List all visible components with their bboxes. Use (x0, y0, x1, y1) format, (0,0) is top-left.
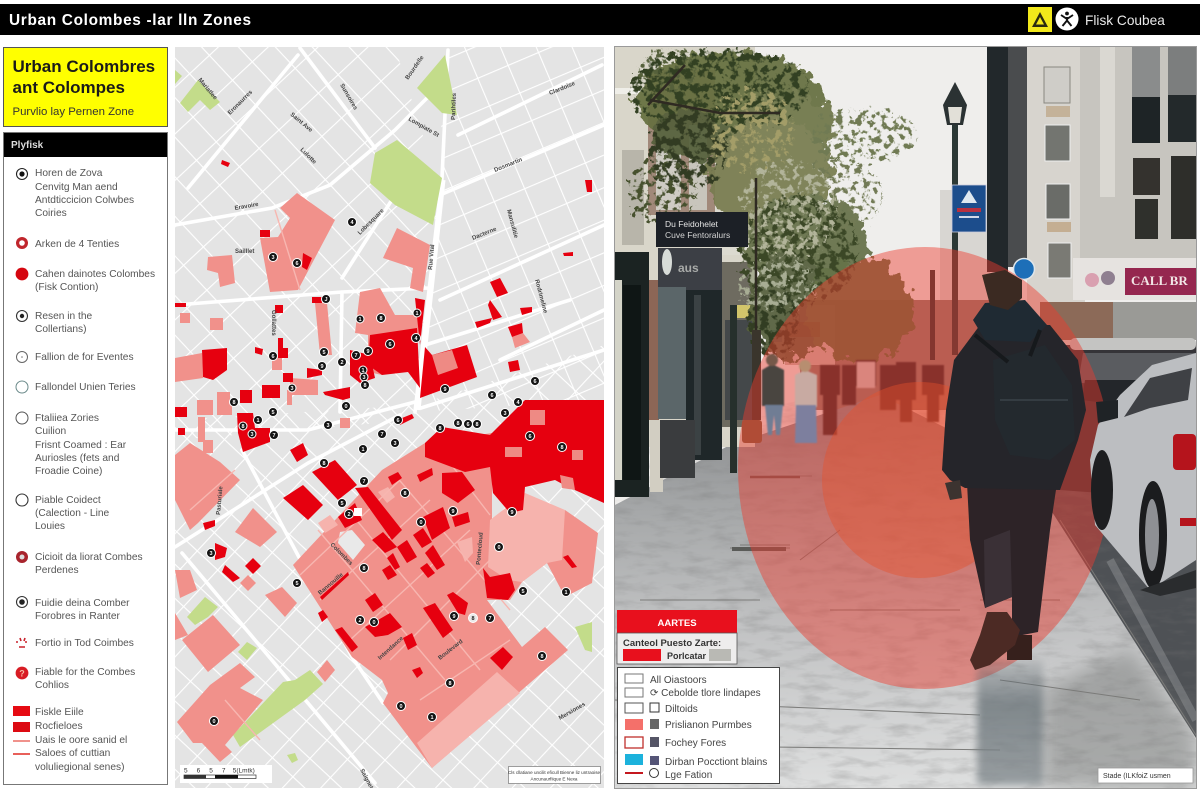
legend item 12 (16, 667, 135, 691)
legend item 1: Cenvitg Man aend (35, 182, 118, 193)
sign board: Cuve Fentoralurs (665, 230, 730, 240)
incident markers: 3 (393, 441, 397, 447)
bar risk label: Flisk Coubea (1085, 13, 1165, 28)
legend item 10 (16, 596, 130, 622)
street name labels: Gollattes (270, 310, 276, 336)
incident markers: 0 (372, 620, 376, 626)
legend line 2 (13, 748, 124, 773)
dark parked car (1060, 338, 1196, 500)
yellow title panel (4, 48, 168, 126)
street name labels: Boulevard (438, 639, 465, 662)
key row 6: Dirban Pocctiont blains (665, 757, 767, 768)
photo panel: street scene (615, 46, 1196, 788)
street name labels: Saint Ave (289, 112, 314, 134)
legend item 4 (16, 310, 93, 335)
facade windows (1044, 47, 1196, 278)
incident markers: 8 (540, 654, 544, 660)
incident markers: 6 (533, 379, 537, 385)
incident markers: 6 (271, 354, 275, 360)
incident markers: 5 (322, 350, 326, 356)
tree dark leaf clusters (630, 48, 860, 360)
incident markers: 4 (516, 400, 520, 406)
incident markers: 9 (366, 349, 370, 355)
incident markers (206, 218, 570, 726)
incident markers: 7 (488, 616, 492, 622)
legend item 9: Perdenes (35, 565, 79, 576)
street name labels: Parihtiles (451, 92, 458, 120)
street name labels: Bourdelle (405, 54, 426, 81)
street name labels: Rue Vital (428, 244, 436, 270)
legend item 3: Cahen dainotes Colombes (35, 269, 155, 280)
incident markers: 2 (358, 618, 362, 624)
incident markers: 7 (354, 353, 358, 359)
legend item 1: Antdticcicion Colwbes (35, 195, 134, 206)
yellow title panel: ant Colompes (12, 78, 125, 97)
legend item 8: Louies (35, 521, 65, 532)
pedestrians near shops (762, 354, 817, 443)
incident markers: 8 (475, 422, 479, 428)
incident markers: 8 (363, 383, 367, 389)
incident markers: 3 (271, 255, 275, 261)
legend item 12: ? (19, 668, 25, 678)
legend item 9: Cicioit da liorat Combes (35, 552, 143, 563)
incident markers: 0 (344, 404, 348, 410)
shopfront: aus (678, 261, 699, 275)
street name labels: Mansulitie (505, 209, 519, 239)
pavement (615, 395, 1196, 788)
sign board: Du Feidohelet (665, 219, 719, 229)
incident markers: 3 (209, 551, 213, 557)
incident markers: 7 (272, 433, 276, 439)
red risk overlay: inner zone (822, 382, 974, 578)
incident markers: 3 (503, 411, 507, 417)
incident markers: 1 (415, 311, 419, 317)
alert header box: Porlcatar (667, 651, 707, 661)
incident markers: 4 (414, 336, 418, 342)
incident markers: 9 (510, 510, 514, 516)
incident markers: 6 (528, 434, 532, 440)
incident markers: 8 (448, 681, 452, 687)
pale risk zones (318, 487, 565, 768)
incident markers: 8 (379, 316, 383, 322)
legend swatch 1: Fiskle Eiile (35, 707, 84, 718)
incident markers: 4 (350, 220, 354, 226)
legend line 2: Saloes of cuttian (35, 748, 110, 759)
incident markers: 1 (564, 590, 568, 596)
legend item 12: Cohlios (35, 680, 69, 691)
street name labels: Dacterne (472, 226, 498, 242)
legend item 7: Cuilion (35, 426, 66, 437)
legend item 10: Forobres in Ranter (35, 611, 121, 622)
alert header box: Canteol Puesto Zarte: (623, 638, 721, 649)
incident markers: 7 (362, 479, 366, 485)
incident markers: 7 (380, 432, 384, 438)
legend item 2 (16, 237, 119, 250)
incident markers: 6 (295, 261, 299, 267)
incident markers: 8 (362, 566, 366, 572)
incident markers: 1 (361, 368, 365, 374)
map panel (175, 47, 604, 790)
incident markers: 8 (403, 491, 407, 497)
map key box (618, 668, 780, 784)
incident markers: 6 (388, 342, 392, 348)
photo credit note (1098, 768, 1193, 783)
street name labels: Eronaurres (227, 89, 255, 116)
key row 5 (625, 737, 726, 749)
street name labels: Colombes (329, 542, 354, 567)
legend line 2: voluliegional senes) (35, 762, 124, 773)
legend item 1 (16, 168, 134, 219)
sign board (656, 212, 748, 247)
left building upper (615, 47, 755, 447)
green parks (175, 55, 592, 763)
incident markers: 3 (326, 423, 330, 429)
inner pink block streets (190, 210, 510, 740)
legend item 8: (Calection - Line (35, 508, 110, 519)
yellow title panel: Urban Colombres (12, 57, 155, 76)
blue round sign (1014, 258, 1034, 280)
dark red risk zones (175, 160, 604, 678)
incident markers: 0 (399, 704, 403, 710)
incident markers: 3 (362, 375, 366, 381)
incident markers: 5 (295, 581, 299, 587)
incident markers: 6 (396, 418, 400, 424)
legend item 12: Fiable for the Combes (35, 667, 135, 678)
tree foliage (630, 46, 920, 420)
legend item 7: Froadie Coine) (35, 466, 102, 477)
street name labels: Lobesquare (357, 208, 386, 236)
photo panel frame (614, 46, 1196, 788)
key row 1: All Oiastoors (650, 675, 707, 686)
incident markers: 5 (340, 501, 344, 507)
shopfront (615, 248, 757, 497)
street name labels: Mersiones (558, 701, 587, 722)
legend item 8 (16, 494, 110, 532)
incident markers: 1 (361, 447, 365, 453)
legend item 6: Fallondel Unien Teries (35, 382, 136, 393)
legend item 4: Resen in the (35, 311, 93, 322)
legend item 5: Fallion de for Eventes (35, 352, 134, 363)
tree sparse outer leaves (630, 46, 920, 231)
incident markers: 1 (358, 317, 362, 323)
incident markers: 2 (340, 360, 344, 366)
key row 3 (625, 703, 698, 715)
street name labels: Clardoise (549, 81, 577, 97)
incident markers: 1 (430, 715, 434, 721)
storefront and call sign (1040, 258, 1196, 340)
incident markers: 3 (250, 432, 254, 438)
incident markers: 8 (471, 616, 475, 622)
incident markers: 0 (212, 719, 216, 725)
pink cuts in red block (432, 350, 583, 490)
empty map block (338, 530, 365, 560)
right dark pole and facade (987, 47, 1196, 347)
street name labels: Mariatlee (196, 77, 218, 102)
sky (615, 47, 1196, 788)
map source note: Cls cllatiane uncilit eficull Bienne liz untraoise (508, 770, 601, 775)
key row 6 (625, 754, 767, 768)
distant pedestrians in red zone (820, 360, 944, 435)
incident markers: 2 (347, 512, 351, 518)
legend line 1: Uais le oore sanid el (35, 735, 127, 746)
alert header box: AARTES (657, 618, 697, 629)
key row 5: Fochey Fores (665, 738, 726, 749)
street name labels: Lulotte (299, 147, 317, 166)
legend item 1: Coiries (35, 208, 67, 219)
legend swatch 2 (13, 721, 83, 732)
silver parked car (1090, 353, 1196, 596)
incident markers: 8 (560, 445, 564, 451)
incident markers: 9 (451, 509, 455, 515)
incident markers: 8 (438, 426, 442, 432)
key row 7: Lge Fation (665, 770, 712, 781)
incident markers: 8 (456, 421, 460, 427)
incident markers: 5 (521, 589, 525, 595)
incident markers: 9 (443, 387, 447, 393)
legend swatch 2: Rocfieloes (35, 721, 83, 732)
legend swatch 1 (13, 706, 84, 718)
storefront and call sign: CALL BR (1131, 273, 1188, 288)
street name labels: Saignet (358, 768, 374, 790)
legend item 11: Fortio in Tod Coimbes (35, 638, 134, 649)
street name labels: Dosmartin (494, 157, 524, 174)
map source note: Ancunaurfiique E Nexa (530, 776, 578, 782)
major roads (175, 48, 604, 783)
map scale bar (180, 765, 272, 783)
yellow title panel: Purvlio lay Pernen Zone (12, 106, 134, 118)
legend item 7: Ftaliiea Zories (35, 413, 99, 424)
street name labels (196, 54, 587, 790)
incident markers: 8 (241, 424, 245, 430)
incident markers: J (324, 297, 328, 303)
lamp post (930, 82, 967, 360)
street name labels: Sailllet (235, 249, 254, 255)
incident markers: 9 (320, 364, 324, 370)
legend item 8: Piable Coidect (35, 495, 101, 506)
walking person (942, 270, 1086, 670)
incident markers: 8 (232, 400, 236, 406)
legend header: Plyfisk (11, 140, 44, 151)
legend item 10: Fuidie deina Comber (35, 598, 130, 609)
incident markers: 6 (466, 422, 470, 428)
photo credit note: Stade (ILKfoiZ usmen (1103, 773, 1171, 780)
blue street sign (952, 185, 986, 232)
key row 1 (625, 674, 707, 686)
incident markers: 0 (497, 545, 501, 551)
sidewalk shadow (977, 660, 1043, 785)
incident markers: 6 (490, 393, 494, 399)
incident markers: 0 (419, 520, 423, 526)
pink risk zones (175, 193, 598, 768)
key row 3: Diltoids (665, 704, 698, 715)
icon: warning triangle (1028, 7, 1052, 32)
street name labels: Lompiate St (407, 117, 440, 139)
street name labels: Sunsoires (338, 83, 358, 112)
street name labels: Eravoire (234, 202, 260, 212)
legend item 7: Frisnt Coamed : Ear (35, 440, 127, 451)
legend item 7: Auriosles (fets and (35, 453, 120, 464)
legend item 3 (16, 268, 155, 293)
street name labels: Pontecloud (476, 532, 485, 565)
incident markers: 3 (290, 386, 294, 392)
top title bar (0, 4, 1200, 35)
incident markers: 1 (256, 418, 260, 424)
legend item 9 (16, 551, 143, 576)
legend item 7 (16, 412, 127, 477)
icon: person in circle (1056, 8, 1078, 30)
map source note (508, 766, 601, 784)
street name labels: Rodrimeline (533, 279, 548, 315)
key row 7 (625, 768, 712, 781)
key row 4: Prislianon Purmbes (665, 720, 752, 731)
legend item 1: Horen de Zova (35, 168, 103, 179)
planter (742, 420, 762, 443)
incident markers: 8 (322, 461, 326, 467)
bar title: Urban Colombes -lar lln Zones (9, 12, 251, 29)
key row 4 (625, 719, 752, 731)
alert header box (617, 610, 737, 664)
red risk overlay: outer zone (738, 247, 1112, 689)
legend item 3: (Fisk Contion) (35, 282, 98, 293)
street name labels: Pasturiale (216, 485, 225, 515)
street name labels: Intendance (377, 635, 405, 661)
key row 2: ⟳ Cebolde tlore lindapes (650, 688, 761, 699)
map scale bar: 5 6 5 7 5(Lmtk) (184, 768, 255, 774)
legend item 4: Collertians) (35, 324, 87, 335)
distant street buildings (770, 190, 990, 410)
incident markers: 5 (271, 410, 275, 416)
legend panel: zone markers (4, 132, 168, 784)
legend item 2: Arken de 4 Tenties (35, 239, 119, 250)
incident markers: 9 (452, 614, 456, 620)
tree light leaf clusters (713, 88, 840, 310)
street name labels: Bannouille (317, 572, 345, 597)
